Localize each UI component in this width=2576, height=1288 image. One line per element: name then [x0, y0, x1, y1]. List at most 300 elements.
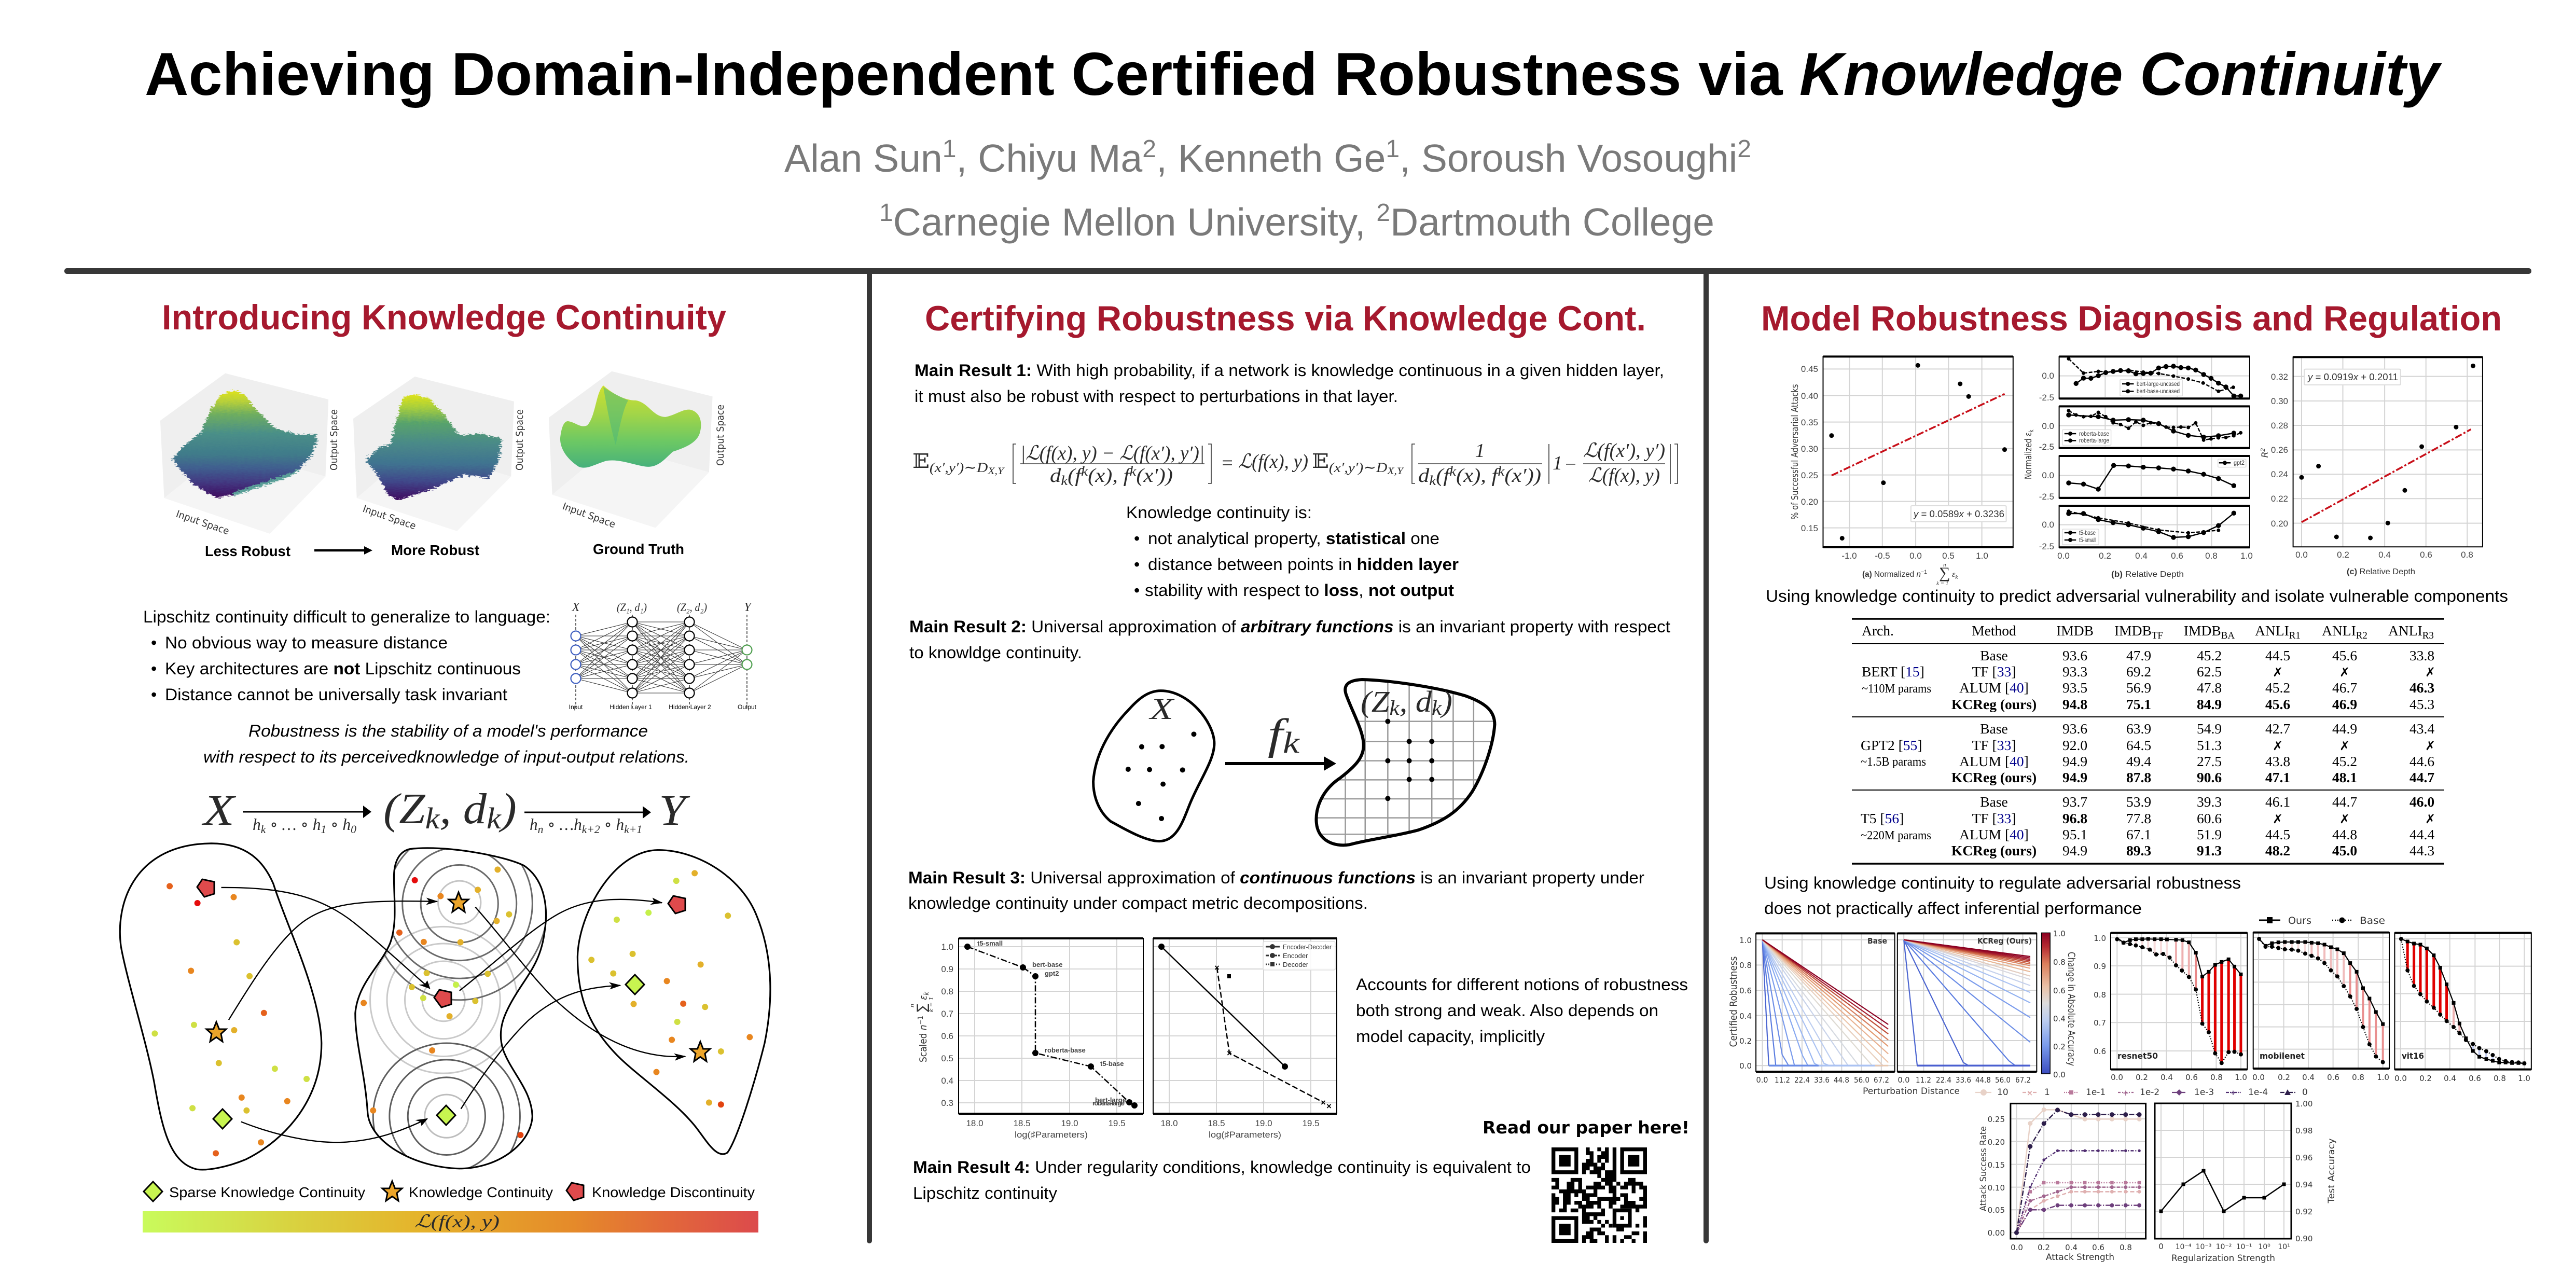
- read our paper callout: Read our paper here!: [1483, 1117, 1689, 1138]
- chart: scaled knowledge continuity vs parameters: 0.4: [941, 1076, 953, 1086]
- lipschitz text block: •: [151, 633, 157, 652]
- chart: certified robustness fans: Certified Robustness: [1728, 957, 1739, 1047]
- chart: attack success rate: Attack Success Rate: [1978, 1126, 1989, 1211]
- chart c: R squared regression: 0.24: [2271, 469, 2288, 479]
- chart: attack success rate: [1978, 1103, 2146, 1263]
- results table: 56.9: [2126, 680, 2151, 696]
- chart: scaled knowledge continuity vs parameters: k = 1: [928, 996, 935, 1012]
- fk mapping diagram: (Z: [1361, 685, 1388, 718]
- chart: certified robustness fans: 0.8: [2053, 958, 2066, 967]
- chart: accuracy under attack per architecture: 1.0: [2235, 1073, 2247, 1082]
- results table: 44.4: [2409, 826, 2434, 842]
- surface plots: [160, 371, 726, 537]
- chart: accuracy under attack per architecture: 0.0: [2394, 1074, 2407, 1083]
- axis labels: Output Space: [328, 409, 340, 470]
- chart: certified robustness fans: KCReg (Ours): [1977, 936, 2032, 946]
- chart a: adversarial attacks regression: -0.5: [1875, 551, 1890, 561]
- legend: regularization strengths: 1: [2044, 1087, 2050, 1098]
- robustness definition: Robustness is the stability of a model's performance: [248, 722, 648, 740]
- main result 4: Main Result 4: Under regularity conditions, knowledge continuity is equivalent to: [913, 1158, 1531, 1176]
- results table: 94.9: [2062, 753, 2087, 769]
- chart: accuracy under attack per architecture: 0.6: [2185, 1073, 2198, 1082]
- chart: test accuracy vs regularization: 0.98: [2295, 1126, 2312, 1135]
- results table: 77.8: [2126, 810, 2151, 826]
- composition equation: ∘ h: [326, 815, 351, 834]
- lipschitz text block: Lipschitz continuity difficult to generalize to language:: [143, 607, 550, 626]
- results table: 96.8: [2062, 810, 2087, 826]
- composition equation: ∘ … ∘ h: [266, 815, 321, 834]
- robustness bound equation: X,Y: [1387, 466, 1405, 477]
- chart: scaled knowledge continuity vs parameters: bert-large: [1095, 1096, 1126, 1104]
- chart: scaled knowledge continuity vs parameters: k: [923, 992, 931, 995]
- neural network diagram: Y: [744, 601, 752, 614]
- chart: scaled knowledge continuity vs parameters: ×: [1326, 1101, 1332, 1111]
- chart: scaled knowledge continuity vs parameters: 18.5: [1013, 1118, 1031, 1128]
- robustness bound equation: [912, 440, 1678, 488]
- results table: ✗: [2339, 665, 2350, 680]
- caption: regulate adversarial robustness: does not practically affect inferential performance: [1764, 899, 2142, 918]
- fk mapping diagram: k: [1283, 726, 1300, 759]
- chart: accuracy under attack per architecture: mobilenet: [2260, 1051, 2305, 1061]
- chart: certified robustness fans: 0.0: [1756, 1075, 1768, 1085]
- results table: KCReg (ours): [1951, 769, 2037, 785]
- chart: certified robustness fans: 0.6: [2053, 986, 2066, 995]
- results table: TF [33]: [1972, 737, 2016, 753]
- chart: accuracy under attack per architecture: 0.2: [2136, 1073, 2148, 1082]
- results table: 47.8: [2197, 680, 2222, 696]
- caption: regulate adversarial robustness: [1764, 874, 2241, 918]
- composition equation: h: [530, 815, 538, 834]
- marker legend: Knowledge Discontinuity: [592, 1184, 755, 1200]
- chart: scaled knowledge continuity vs parameters: 19.0: [1255, 1118, 1272, 1128]
- robustness notions note: model capacity, implicitly: [1356, 1027, 1545, 1046]
- results table: IMDB: [2114, 622, 2152, 639]
- chart: accuracy under attack per architecture: 0.8: [2210, 1073, 2223, 1082]
- legend: regularization strengths: 1e-4: [2248, 1087, 2268, 1098]
- neural network diagram: Input: [569, 703, 583, 711]
- robustness bound equation: (x′,y′)∼D: [1329, 460, 1388, 475]
- robustness bound equation: (x′)): [1504, 465, 1541, 487]
- legend: regularization strengths: +: [2231, 1089, 2236, 1097]
- fk mapping diagram: ): [1440, 685, 1452, 718]
- chart: test accuracy vs regularization: 10⁻³: [2196, 1243, 2211, 1251]
- fk mapping diagram: k: [1432, 696, 1443, 719]
- chart: accuracy under attack per architecture: 0.7: [2094, 1018, 2106, 1028]
- surface captions: [205, 541, 684, 559]
- robustness bound equation: X,Y: [987, 466, 1005, 477]
- results table: 91.3: [2197, 842, 2222, 858]
- legend: regularization strengths: +: [2123, 1088, 2129, 1098]
- chart: scaled knowledge continuity vs parameters: 18.5: [1208, 1118, 1225, 1128]
- chart a: adversarial attacks regression: (a) Normalized n: [1862, 570, 1921, 579]
- knowledge continuity properties: distance between points in hidden layer: [1148, 555, 1459, 574]
- results table: TF [33]: [1972, 810, 2016, 826]
- chart: accuracy under attack per architecture: 0.6: [2094, 1047, 2106, 1056]
- robustness bound equation: (f: [1436, 465, 1452, 487]
- heading: model robustness: Model Robustness Diagnosis and Regulation: [1761, 299, 2502, 338]
- chart: attack success rate: Attack Strength: [2046, 1252, 2114, 1263]
- chart: accuracy under attack per architecture: vit16: [2402, 1051, 2424, 1061]
- heading: introducing: Introducing Knowledge Continuity: [162, 298, 726, 337]
- chart a: adversarial attacks regression: ∑: [1939, 564, 1950, 581]
- results table: 93.6: [2062, 647, 2087, 663]
- chart b: normalized epsilon by depth: (b) Relative Depth: [2111, 570, 2184, 579]
- main result 3: [908, 868, 1644, 912]
- neural network diagram: (Z₁, d₁): [617, 601, 647, 614]
- composition equation: ∘ …h: [543, 815, 582, 834]
- chart: certified robustness fans: [1728, 929, 2077, 1097]
- composition equation: k: [425, 801, 440, 835]
- chart: attack success rate: 0.8: [2120, 1243, 2132, 1252]
- chart: certified robustness fans: 44.8: [1834, 1075, 1849, 1085]
- chart: test accuracy vs regularization: Regularization Strength: [2171, 1253, 2275, 1264]
- loss colour bar: [143, 1211, 758, 1232]
- results table: 94.9: [2062, 769, 2087, 785]
- chart: certified robustness fans: 0.4: [1739, 1012, 1752, 1021]
- results table: 47.9: [2126, 647, 2151, 663]
- results table: [1852, 619, 2444, 864]
- chart c: R squared regression: 0.26: [2271, 445, 2288, 455]
- knowledge continuity properties: •: [1134, 555, 1140, 574]
- results table: 44.8: [2332, 826, 2357, 842]
- chart: accuracy under attack per architecture: 0.8: [2094, 990, 2106, 1000]
- marker legend: [144, 1181, 755, 1201]
- chart: certified robustness fans: 67.2: [1874, 1075, 1889, 1085]
- chart a: adversarial attacks regression: k = 1: [1936, 580, 1948, 587]
- results table: IMDB: [2184, 622, 2221, 639]
- chart b: normalized epsilon by depth: t5-base: [2079, 529, 2096, 536]
- results table: ~1.5B params: [1861, 755, 1926, 769]
- chart a: adversarial attacks regression: 0.45: [1801, 364, 1818, 374]
- neural network diagram: (Z₂, d₂): [677, 601, 707, 614]
- results table: 54.9: [2197, 721, 2222, 737]
- knowledge continuity properties: •: [1134, 529, 1140, 548]
- chart b: normalized epsilon by depth: -2.5: [2039, 492, 2054, 502]
- chart: test accuracy vs regularization: 10⁰: [2258, 1243, 2270, 1251]
- results table: 63.9: [2126, 721, 2151, 737]
- robustness bound equation: k: [1449, 464, 1457, 479]
- chart: scaled knowledge continuity vs parameters: roberta-large: [1092, 1099, 1125, 1107]
- chart: test accuracy vs regularization: 0.92: [2295, 1207, 2312, 1216]
- chart c: R squared regression: 0.28: [2271, 421, 2288, 431]
- knowledge continuity properties: [1126, 503, 1459, 600]
- results table: ✗: [2273, 812, 2283, 826]
- results table: ANLI: [2255, 622, 2289, 639]
- chart c: R squared regression: 0.8: [2461, 550, 2473, 560]
- chart: certified robustness fans: 56.0: [1854, 1075, 1869, 1085]
- chart: attack success rate: 0.05: [1988, 1206, 2005, 1215]
- results table: ANLI: [2388, 622, 2422, 639]
- chart: accuracy under attack per architecture: 0.8: [2494, 1074, 2506, 1083]
- fk mapping diagram: [1093, 674, 1503, 847]
- chart b: normalized epsilon by depth: -2.5: [2039, 442, 2054, 452]
- chart a: adversarial attacks regression: [1790, 356, 2013, 587]
- panel: certifying robustness: [908, 299, 1689, 1243]
- chart: scaled knowledge continuity vs parameters: log(♯Parameters): [1209, 1130, 1281, 1140]
- chart b: normalized epsilon by depth: bert-large-uncased: [2137, 380, 2180, 387]
- robustness bound equation: k: [1061, 473, 1068, 488]
- chart: accuracy under attack per architecture: resnet50: [2117, 1051, 2158, 1061]
- chart a: adversarial attacks regression: y = 0.0589x + 0.3236: [1913, 509, 2004, 519]
- chart: scaled knowledge continuity vs parameters: ×: [1227, 1048, 1232, 1058]
- chart: certified robustness fans: 0.4: [2053, 1014, 2066, 1023]
- axis labels: [174, 405, 726, 537]
- results table: 44.7: [2332, 794, 2357, 810]
- lipschitz text block: Distance cannot be universally task invariant: [165, 685, 507, 704]
- chart c: R squared regression: 0.22: [2271, 494, 2288, 504]
- QR code: [1552, 1147, 1647, 1243]
- chart: scaled knowledge continuity vs parameters: 0.8: [941, 987, 953, 996]
- results table: 48.1: [2332, 769, 2357, 785]
- chart: scaled knowledge continuity vs parameters: n: [909, 1004, 916, 1007]
- chart b: normalized epsilon by depth: -2.5: [2039, 393, 2054, 403]
- results table: T5 [56]: [1861, 810, 1904, 826]
- results table: 93.6: [2062, 721, 2087, 737]
- results table: 46.1: [2265, 794, 2290, 810]
- main result 3: knowledge continuity under compact metric decompositions.: [908, 894, 1368, 912]
- chart b: normalized epsilon by depth: 0.6: [2171, 551, 2183, 561]
- chart: scaled knowledge continuity vs parameters: 0.5: [941, 1054, 953, 1063]
- legend: regularization strengths: 10: [1997, 1087, 2009, 1098]
- robustness bound equation: (x), f: [1088, 465, 1132, 487]
- chart b: normalized epsilon by depth: Normalized ε: [2023, 418, 2034, 479]
- results table: 45.2: [2265, 680, 2290, 696]
- chart b: normalized epsilon by depth: 0.0: [2042, 371, 2054, 381]
- chart b: normalized epsilon by depth: t5-small: [2079, 536, 2096, 544]
- results table: 90.6: [2197, 769, 2222, 785]
- main result 2: to knowldge continuity.: [909, 643, 1082, 662]
- chart a: adversarial attacks regression: ε: [1952, 570, 1955, 579]
- chart b: normalized epsilon by depth: 0.2: [2099, 551, 2111, 561]
- robustness bound equation: 1: [1475, 440, 1485, 462]
- composition equation: (Z: [383, 785, 422, 833]
- chart c: R squared regression: (c) Relative Depth: [2347, 567, 2415, 576]
- chart: scaled knowledge continuity vs parameters: gpt2: [1045, 970, 1059, 977]
- chart: attack success rate: 0.6: [2092, 1243, 2104, 1252]
- chart c: R squared regression: 0.2: [2337, 550, 2349, 560]
- chart: scaled knowledge continuity vs parameters: log(♯Parameters): [1015, 1130, 1088, 1140]
- results table: 43.8: [2265, 753, 2290, 769]
- knowledge manifolds diagram: [119, 842, 771, 1170]
- chart b: normalized epsilon by depth: -2.5: [2039, 542, 2054, 551]
- results table: 67.1: [2126, 826, 2151, 842]
- surface captions: More Robust: [391, 542, 479, 558]
- results table: Method: [1972, 622, 2016, 639]
- results table: 53.9: [2126, 794, 2151, 810]
- results table: 48.2: [2265, 842, 2290, 858]
- chart a: adversarial attacks regression: 0.35: [1801, 418, 1818, 427]
- chart a: adversarial attacks regression: % of Successful Adversarial Attacks: [1790, 384, 1801, 520]
- chart a: adversarial attacks regression: -1.0: [1841, 551, 1857, 561]
- lipschitz text block: Key architectures are not Lipschitz continuous: [165, 659, 521, 678]
- panel: introducing knowledge continuity: [120, 298, 770, 1232]
- results table: 45.3: [2409, 696, 2434, 712]
- chart c: R squared regression: 0.32: [2271, 372, 2288, 382]
- chart: accuracy under attack per architecture: 0.6: [2327, 1073, 2339, 1082]
- chart: accuracy under attack per architecture: 0.0: [2252, 1073, 2265, 1082]
- results table: 64.5: [2126, 737, 2151, 753]
- chart a: adversarial attacks regression: n: [1943, 562, 1946, 568]
- chart: scaled knowledge continuity vs parameters: 18.0: [1160, 1118, 1178, 1128]
- neural network diagram: Output: [738, 703, 757, 711]
- robustness notions note: [1356, 975, 1688, 1046]
- chart: certified robustness fans: 22.4: [1936, 1075, 1951, 1085]
- lipschitz text block: •: [151, 685, 157, 704]
- chart c: R squared regression: [2260, 357, 2483, 576]
- legend: regularization strengths: [1975, 1087, 2308, 1098]
- chart: accuracy under attack per architecture: 0.2: [2278, 1073, 2290, 1082]
- chart: scaled knowledge continuity vs parameters: [909, 938, 1337, 1140]
- affiliations: 1: [879, 199, 893, 227]
- chart b: normalized epsilon by depth: [2023, 356, 2253, 579]
- results table: ✗: [2339, 812, 2350, 826]
- robustness bound equation: k: [1429, 473, 1436, 488]
- results table: 94.8: [2062, 696, 2087, 712]
- results table: ALUM [40]: [1959, 680, 2029, 696]
- results table: 44.3: [2409, 842, 2434, 858]
- main result 1: Main Result 1: With high probability, if a network is knowledge continuous in a given hidden layer,: [915, 361, 1664, 380]
- chart: test accuracy vs regularization: 10⁻⁴: [2176, 1243, 2192, 1251]
- robustness bound equation: ℒ(f(x), y): [1238, 451, 1308, 473]
- chart: certified robustness fans: 0.2: [2053, 1042, 2066, 1051]
- axis labels: Input Space: [561, 501, 617, 530]
- authors: , Soroush Vosoughi: [1400, 136, 1737, 180]
- robustness notions note: Accounts for different notions of robustness: [1356, 975, 1688, 994]
- chart: attack success rate: 0.4: [2065, 1243, 2078, 1252]
- robustness bound equation: k: [1129, 464, 1137, 479]
- chart b: normalized epsilon by depth: gpt2: [2234, 459, 2245, 466]
- results table: 45.2: [2197, 647, 2222, 663]
- chart b: normalized epsilon by depth: 0.0: [2042, 421, 2054, 431]
- chart: accuracy under attack per architecture: 1.0: [2377, 1073, 2389, 1082]
- results table: 94.9: [2062, 842, 2087, 858]
- chart: test accuracy vs regularization: 0.96: [2295, 1153, 2312, 1162]
- robustness bound equation: (x′,y′)∼D: [930, 460, 988, 475]
- chart: test accuracy vs regularization: Test Accuracy: [2326, 1139, 2337, 1204]
- chart a: adversarial attacks regression: 0.15: [1801, 523, 1818, 533]
- robustness bound equation: =: [1221, 452, 1234, 474]
- chart: certified robustness fans: 56.0: [1995, 1075, 2011, 1085]
- composition equation: , d: [439, 785, 487, 833]
- chart: scaled knowledge continuity vs parameters: Encoder-Decoder: [1283, 943, 1332, 951]
- composition equation: n: [538, 823, 543, 836]
- robustness bound equation: (x′)): [1136, 465, 1173, 487]
- chart: scaled knowledge continuity vs parameters: t5-small: [977, 939, 1003, 947]
- results table: 93.7: [2062, 794, 2087, 810]
- chart: accuracy under attack per architecture: 0.6: [2469, 1074, 2481, 1083]
- chart: test accuracy vs regularization: 10¹: [2278, 1243, 2290, 1251]
- chart: scaled knowledge continuity vs parameters: ∑: [915, 1000, 930, 1016]
- robustness bound equation: ℒ(f(x), y): [1588, 465, 1660, 487]
- chart: accuracy under attack per architecture: 0.4: [2160, 1073, 2173, 1082]
- chart: test accuracy vs regularization: 1.00: [2295, 1099, 2312, 1109]
- chart: certified robustness fans: Base: [1867, 936, 1887, 946]
- chart: certified robustness fans: Perturbation Distance: [1863, 1086, 1960, 1097]
- legend: regularization strengths: 1e-3: [2194, 1087, 2214, 1098]
- results table: 43.4: [2409, 721, 2434, 737]
- marker legend: Sparse Knowledge Continuity: [169, 1184, 365, 1200]
- chart: scaled knowledge continuity vs parameters: t5-base: [1100, 1060, 1124, 1068]
- results table: 44.6: [2409, 753, 2434, 769]
- affiliations: 2: [1376, 199, 1390, 227]
- results table: 75.1: [2126, 696, 2151, 712]
- results table: 44.9: [2332, 721, 2357, 737]
- title: Achieving Domain-Independent Certified Robustness via Knowledge Continuity: [145, 40, 2442, 108]
- chart: scaled knowledge continuity vs parameters: 19.5: [1302, 1118, 1320, 1128]
- results table: ALUM [40]: [1959, 826, 2029, 842]
- chart: attack success rate: 0.0: [2011, 1243, 2023, 1252]
- fk mapping diagram: k: [1390, 696, 1400, 719]
- composition equation: 0: [351, 823, 356, 836]
- chart: scaled knowledge continuity vs parameters: 0.3: [941, 1098, 953, 1108]
- results table: KCReg (ours): [1951, 842, 2037, 858]
- robustness definition: [203, 722, 689, 766]
- results table: 93.3: [2062, 663, 2087, 680]
- knowledge continuity properties: Knowledge continuity is:: [1126, 503, 1312, 522]
- chart: test accuracy vs regularization: 0.90: [2295, 1234, 2312, 1243]
- axis labels: Input Space: [361, 503, 418, 532]
- chart a: adversarial attacks regression: 0.5: [1942, 551, 1955, 561]
- chart: accuracy under attack per architecture: 0.4: [2444, 1074, 2456, 1083]
- results table: ✗: [2339, 739, 2350, 753]
- chart: accuracy under attack per architecture: 1.0: [2094, 934, 2106, 943]
- chart: certified robustness fans: 1.0: [2053, 929, 2066, 938]
- chart: certified robustness fans: 44.8: [1975, 1075, 1991, 1085]
- robustness bound equation: k: [1498, 464, 1505, 479]
- neural network diagram: X: [572, 601, 580, 614]
- knowledge continuity properties: stability with respect to loss, not output: [1145, 581, 1454, 600]
- chart: test accuracy vs regularization: [2155, 1099, 2337, 1264]
- chart c: R squared regression: 0.6: [2420, 550, 2432, 560]
- legend: regularization strengths: 1e-1: [2086, 1087, 2106, 1098]
- main result 1: it must also be robust with respect to perturbations in that layer.: [915, 387, 1398, 406]
- chart: certified robustness fans: 0.0: [2053, 1070, 2066, 1079]
- chart: scaled knowledge continuity vs parameters: 19.5: [1108, 1118, 1126, 1128]
- results table: 95.1: [2062, 826, 2087, 842]
- results table: ~220M params: [1861, 829, 1931, 842]
- chart c: R squared regression: y = 0.0919x + 0.2011: [2307, 372, 2398, 382]
- knowledge continuity properties: not analytical property, statistical one: [1148, 529, 1439, 548]
- results table: 46.7: [2332, 680, 2357, 696]
- heading: certifying: Certifying Robustness via Knowledge Cont.: [925, 299, 1646, 338]
- results table: 51.3: [2197, 737, 2222, 753]
- chart: test accuracy vs regularization: 0.94: [2295, 1180, 2312, 1189]
- lipschitz text block: [143, 607, 550, 704]
- results table: ANLI: [2322, 622, 2356, 639]
- chart: accuracy under attack per architecture: 0.9: [2094, 962, 2106, 971]
- chart a: adversarial attacks regression: 0.30: [1801, 444, 1818, 454]
- chart: certified robustness fans: 0.6: [1739, 986, 1752, 995]
- results table: 60.6: [2197, 810, 2222, 826]
- robustness bound equation: (f: [1068, 465, 1084, 487]
- results table: ✗: [2425, 739, 2435, 753]
- chart: scaled knowledge continuity vs parameters: Scaled n: [918, 1024, 929, 1062]
- chart: certified robustness fans: 0.2: [1739, 1036, 1752, 1046]
- chart: attack success rate: 0.15: [1988, 1160, 2005, 1170]
- chart a: adversarial attacks regression: 0.20: [1801, 497, 1818, 507]
- authors: 1: [943, 135, 956, 163]
- results table: 44.7: [2409, 769, 2434, 785]
- results table: BERT [15]: [1862, 663, 1924, 680]
- panel: model robustness diagnosis and regulation: [1728, 299, 2531, 1264]
- chart: accuracy under attack per architecture: 1.0: [2518, 1074, 2530, 1083]
- robustness bound equation: ℒ(f(x′), y′): [1583, 440, 1665, 462]
- chart: accuracy under attack per architecture: [2094, 915, 2531, 1083]
- chart: certified robustness fans: 0.8: [1739, 961, 1752, 970]
- results table: Base: [1980, 647, 2008, 663]
- chart c: R squared regression: R: [2260, 452, 2270, 458]
- authors: 1: [1386, 135, 1400, 163]
